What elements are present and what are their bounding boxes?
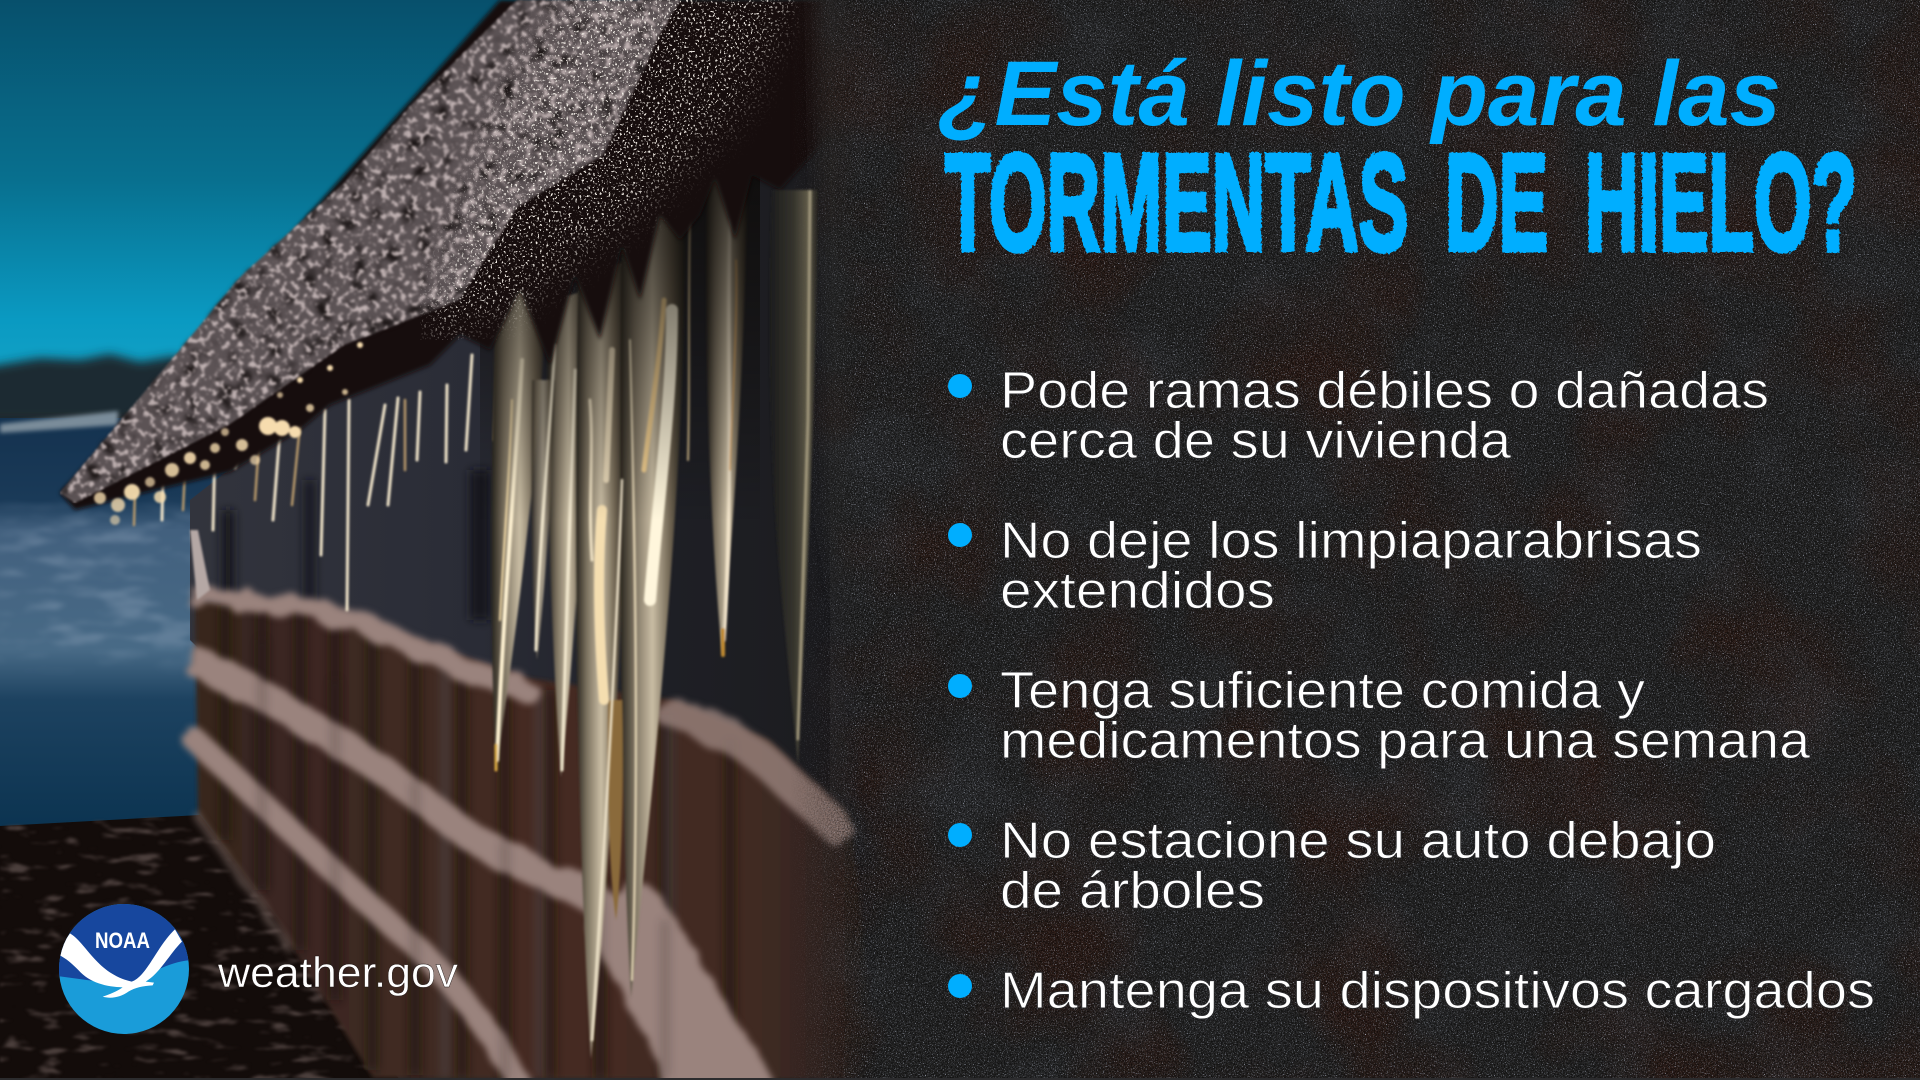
icon: NOAA logo: NOAA [95, 928, 150, 953]
dark eave band with drips [60, 0, 835, 510]
ground [0, 815, 400, 1080]
snowy roof [60, 0, 800, 503]
bullet item 2 [948, 512, 1702, 620]
bullet item 4 [948, 812, 1716, 920]
icicle tops in shadow [480, 100, 760, 520]
bullet item 1: Pode ramas débiles o dañadas [1000, 362, 1769, 420]
website label: weather.gov [217, 949, 459, 997]
large icicles [480, 100, 760, 1059]
bullet item 3 [948, 662, 1810, 770]
bullet item 1 [948, 362, 1769, 470]
joints crossing snow stripes [262, 640, 665, 1078]
small icicles on eave [134, 325, 525, 610]
panel: photo of icicles on building [0, 0, 880, 1080]
bullet item 4: No estacione su auto debajo [1000, 812, 1716, 870]
distant trees [0, 354, 200, 420]
bullet item 5: Mantenga su dispositivos cargados [1000, 962, 1875, 1020]
sky [0, 0, 640, 400]
bullet item 3: medicamentos para una semana [1000, 712, 1810, 770]
bullet item 1: cerca de su vivienda [1000, 412, 1511, 470]
wall upper plaster [190, 0, 830, 1080]
bokeh highlights on eave [94, 342, 363, 525]
title [938, 43, 1857, 280]
bullet item 3: Tenga suficiente comida y [1000, 662, 1645, 720]
title line 1: ¿Está listo para las [938, 43, 1781, 145]
brick wall [190, 530, 880, 1080]
bottom edge line [0, 1078, 1920, 1080]
wall corner edge [190, 530, 210, 600]
snow stripes on brick [197, 596, 835, 1080]
bullet list [948, 362, 1875, 1020]
bullet item 2: extendidos [1000, 562, 1275, 620]
water [0, 418, 240, 832]
icicle glints [496, 215, 736, 1040]
snowy bank [0, 411, 118, 433]
bluish mortar lines [445, 650, 670, 1078]
far right icicle [770, 190, 818, 765]
bullet item 2: No deje los limpiaparabrisas [1000, 512, 1702, 570]
brick vertical joints [225, 605, 730, 1078]
wall posts [222, 470, 490, 620]
glitter on sharp part of roof [420, 0, 800, 340]
panel: dark textured background [790, 0, 1920, 1080]
bullet item 4: de árboles [1000, 862, 1265, 920]
icon: NOAA logo [59, 904, 189, 1034]
